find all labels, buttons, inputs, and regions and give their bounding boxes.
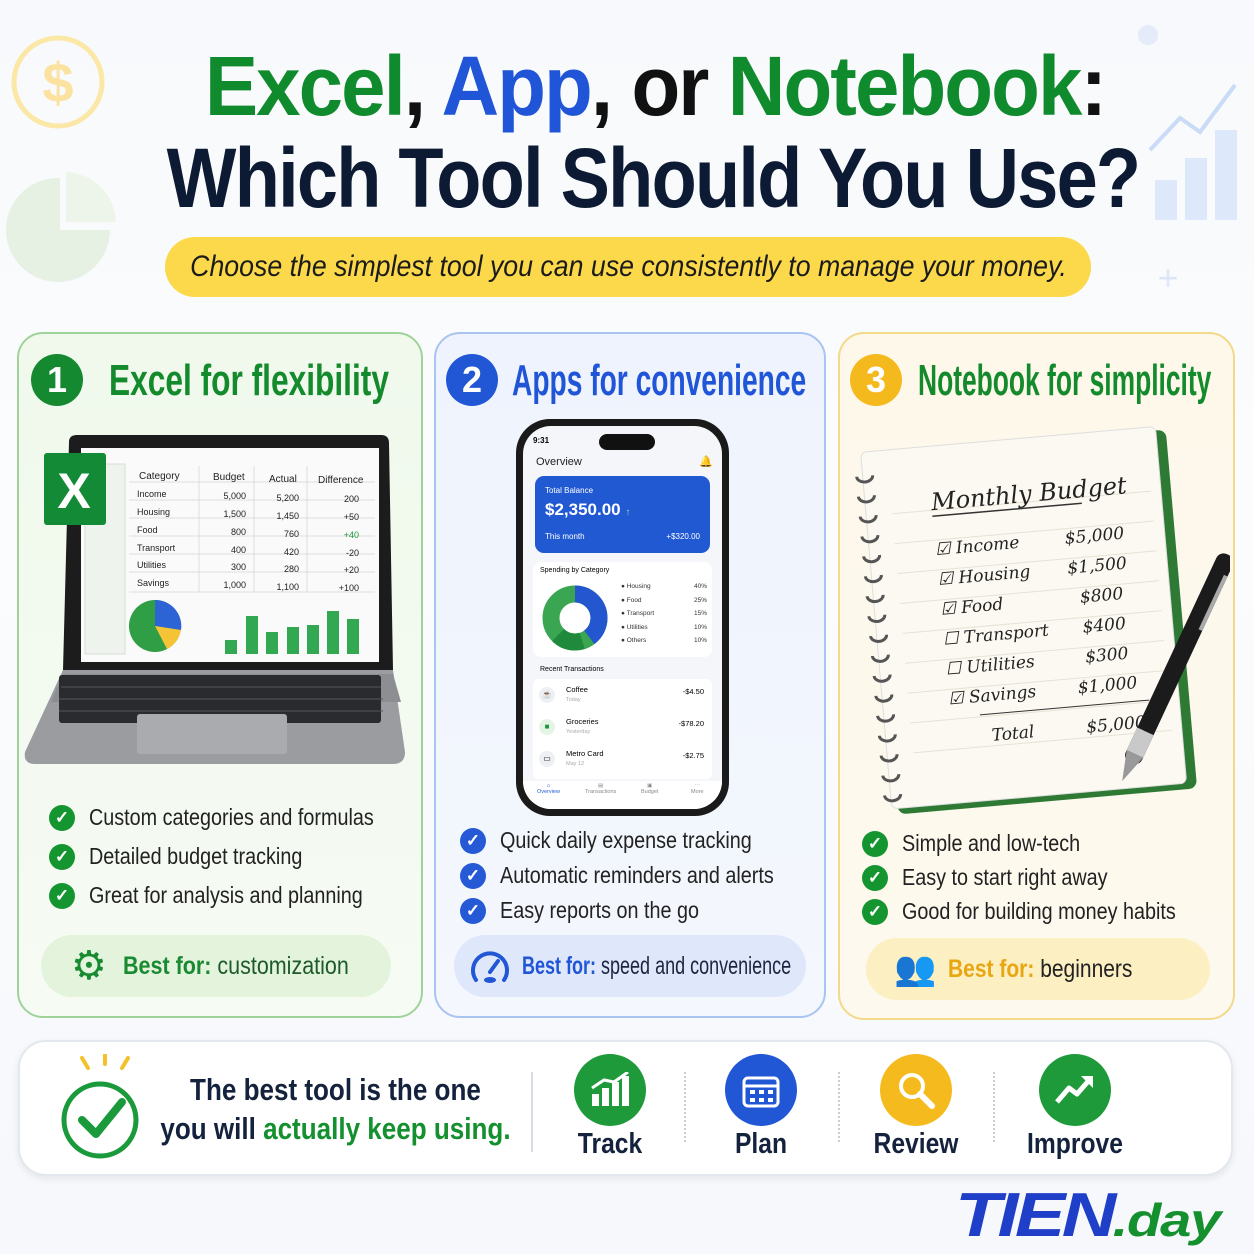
notebook illustration: Monthly Budget	[929, 471, 1128, 516]
laptop illustration: 280	[284, 564, 299, 574]
laptop illustration: +50	[344, 512, 359, 522]
phone illustration: Today	[566, 697, 581, 703]
bullets: notebook: Simple and low-tech	[902, 830, 1080, 856]
phone illustration: 40%	[694, 583, 707, 590]
bullets: notebook	[862, 830, 1176, 925]
heading: notebook: Notebook for simplicity	[918, 356, 1211, 405]
bullets: excel: ✓	[55, 808, 69, 826]
phone illustration: 🔔	[699, 456, 713, 468]
heading: notebook: 3	[866, 359, 886, 400]
laptop illustration: Savings	[137, 578, 170, 588]
notebook illustration	[855, 426, 1230, 814]
notebook illustration: Total	[991, 722, 1035, 746]
notebook illustration: $5,000	[1064, 524, 1125, 549]
notebook illustration: $1,500	[1067, 554, 1128, 579]
logo: TIEN.day	[955, 1181, 1220, 1250]
step: plan: Plan	[735, 1128, 787, 1160]
tagline: you will actually keep using.	[160, 1111, 510, 1146]
heading: apps: Apps for convenience	[512, 356, 806, 405]
notebook illustration: ☑ Savings	[948, 682, 1037, 710]
bullets: apps: ✓	[466, 900, 480, 920]
laptop illustration: Difference	[318, 475, 364, 486]
phone illustration: ● Transport	[621, 610, 654, 617]
bullets: excel: Detailed budget tracking	[89, 843, 302, 869]
laptop illustration: 1,100	[276, 582, 299, 592]
heading: excel: Excel for flexibility	[109, 356, 389, 405]
bullets: apps	[460, 827, 774, 924]
step: review	[874, 1054, 958, 1160]
subtitle pill: Choose the simplest tool you can use consistently to manage your money.	[190, 250, 1066, 283]
step: improve	[1027, 1054, 1123, 1160]
step: improve: Improve	[1027, 1128, 1123, 1160]
laptop illustration: Utilities	[137, 560, 167, 570]
laptop illustration: +20	[344, 565, 359, 575]
laptop illustration: 1,500	[223, 509, 246, 519]
best for: excel: ⚙	[71, 944, 107, 988]
phone illustration: 15%	[694, 610, 707, 617]
laptop illustration: 1,000	[223, 580, 246, 590]
laptop illustration: Income	[137, 489, 167, 499]
best for: notebook: 👥	[894, 950, 936, 988]
laptop illustration: -20	[346, 548, 359, 558]
step: review: Review	[874, 1128, 958, 1160]
bullets: apps: Automatic reminders and alerts	[500, 862, 774, 888]
phone illustration: Transactions	[585, 789, 616, 795]
laptop illustration: Budget	[213, 472, 245, 483]
laptop illustration: +100	[339, 583, 359, 593]
step: track	[574, 1054, 646, 1160]
bullets: excel	[49, 804, 374, 909]
phone illustration: Budget	[641, 789, 658, 795]
laptop illustration: 300	[231, 562, 246, 572]
bullets: excel: Great for analysis and planning	[89, 882, 363, 908]
bullets: excel: ✓	[55, 846, 69, 866]
notebook illustration: $800	[1079, 584, 1124, 608]
phone illustration: Overview	[537, 789, 560, 795]
phone illustration: -$2.75	[683, 751, 704, 760]
laptop illustration: Transport	[137, 543, 176, 553]
phone illustration: More	[691, 789, 704, 795]
laptop illustration: Food	[137, 525, 158, 535]
bullets: notebook: ✓	[868, 902, 882, 920]
panel: apps	[434, 332, 826, 1018]
phone illustration: ■	[545, 722, 549, 731]
best for: excel	[41, 935, 391, 997]
bullets: notebook: Easy to start right away	[902, 864, 1108, 890]
laptop illustration: 5,200	[276, 493, 299, 503]
decorative background icons: $	[42, 51, 74, 114]
heading: apps: 2	[462, 359, 482, 400]
subtitle pill	[165, 237, 1091, 297]
best for: notebook: Best for: beginners	[948, 954, 1133, 982]
bullets: apps: ✓	[466, 830, 480, 850]
phone illustration: Overview	[536, 456, 582, 468]
phone illustration: -$78.20	[679, 719, 704, 728]
phone illustration: Yesterday	[566, 729, 590, 735]
bullets: excel: ✓	[55, 886, 69, 904]
phone illustration: This month	[545, 532, 585, 541]
best for: apps	[454, 935, 806, 997]
decorative background icons	[6, 25, 1237, 298]
phone illustration: 10%	[694, 624, 707, 630]
best for: excel: Best for: customization	[123, 952, 349, 980]
laptop illustration: 760	[284, 529, 299, 539]
phone illustration: -$4.50	[683, 687, 704, 696]
phone illustration: May 12	[566, 761, 584, 767]
heading: excel: 1	[47, 359, 67, 400]
notebook illustration: $1,000	[1077, 673, 1138, 698]
phone illustration: Coffee	[566, 685, 588, 694]
bullets: notebook: ✓	[868, 868, 882, 886]
bullets: apps: Easy reports on the go	[500, 897, 699, 923]
notebook illustration: $300	[1084, 644, 1129, 667]
bullets: apps: ✓	[466, 866, 480, 884]
tagline: The best tool is the one	[190, 1072, 480, 1107]
title: Which Tool Should You Use?	[167, 131, 1139, 225]
bullets: notebook: Good for building money habits	[902, 898, 1176, 924]
laptop illustration: Category	[139, 471, 180, 482]
laptop illustration: 420	[284, 547, 299, 557]
title: Excel, App, or Notebook:	[205, 39, 1105, 133]
best for: apps: Best for: speed and convenience	[522, 952, 791, 980]
phone illustration: Recent Transactions	[540, 666, 604, 673]
phone illustration: 9:31	[533, 436, 549, 445]
phone illustration: 25%	[694, 596, 707, 604]
phone illustration: ● Others	[621, 637, 646, 644]
phone illustration: Groceries	[566, 717, 599, 726]
phone illustration: ● Housing	[621, 583, 651, 590]
bullets: notebook: ✓	[868, 834, 882, 852]
laptop illustration: 1,450	[276, 511, 299, 521]
notebook illustration: ☑ Income	[934, 533, 1020, 560]
phone illustration: Spending by Category	[540, 567, 609, 574]
phone illustration: 10%	[694, 637, 707, 644]
phone illustration: ● Food	[621, 596, 642, 604]
phone illustration: ▤	[598, 783, 603, 789]
best for: notebook	[866, 938, 1210, 1000]
step: track: Track	[578, 1128, 642, 1160]
tagline	[160, 1072, 510, 1146]
phone illustration: ☕	[542, 690, 552, 699]
laptop illustration: 800	[231, 527, 246, 537]
phone illustration: Metro Card	[566, 749, 604, 758]
phone illustration: +$320.00	[666, 532, 700, 541]
notebook illustration: ☑ Housing	[937, 562, 1031, 590]
decorative background icons: +	[1157, 257, 1179, 298]
laptop illustration: 5,000	[223, 491, 246, 501]
phone illustration: Total Balance	[545, 486, 593, 495]
notebook illustration: ☑ Food	[940, 594, 1004, 620]
bullets: excel: Custom categories and formulas	[89, 804, 374, 830]
laptop illustration: Actual	[269, 474, 297, 485]
laptop illustration: X	[57, 463, 91, 519]
phone illustration	[516, 419, 729, 816]
laptop illustration: 400	[231, 545, 246, 555]
laptop illustration	[24, 435, 405, 764]
icon: big check	[62, 1054, 138, 1158]
phone illustration: $2,350.00 ↑	[545, 500, 630, 519]
bullets: apps: Quick daily expense tracking	[500, 827, 752, 853]
notebook illustration: ☐ Transport	[942, 621, 1050, 650]
step: plan	[725, 1054, 797, 1160]
phone illustration: ▣	[647, 783, 652, 789]
panel: notebook	[838, 332, 1235, 1020]
phone illustration: ● Utilities	[621, 624, 648, 630]
bottom bar	[18, 1040, 1233, 1176]
laptop illustration: +40	[344, 530, 359, 540]
notebook illustration: ☐ Utilities	[945, 652, 1036, 680]
laptop illustration: 200	[344, 494, 359, 504]
laptop illustration: Housing	[137, 507, 170, 517]
notebook illustration: $5,000	[1086, 712, 1147, 738]
title	[166, 39, 1139, 225]
phone illustration: ⋯	[695, 783, 700, 789]
phone illustration: ⌂	[547, 783, 550, 789]
panel: excel	[17, 332, 423, 1018]
notebook illustration: $400	[1082, 614, 1127, 638]
phone illustration: ▭	[543, 754, 551, 763]
steps	[574, 1054, 1123, 1160]
